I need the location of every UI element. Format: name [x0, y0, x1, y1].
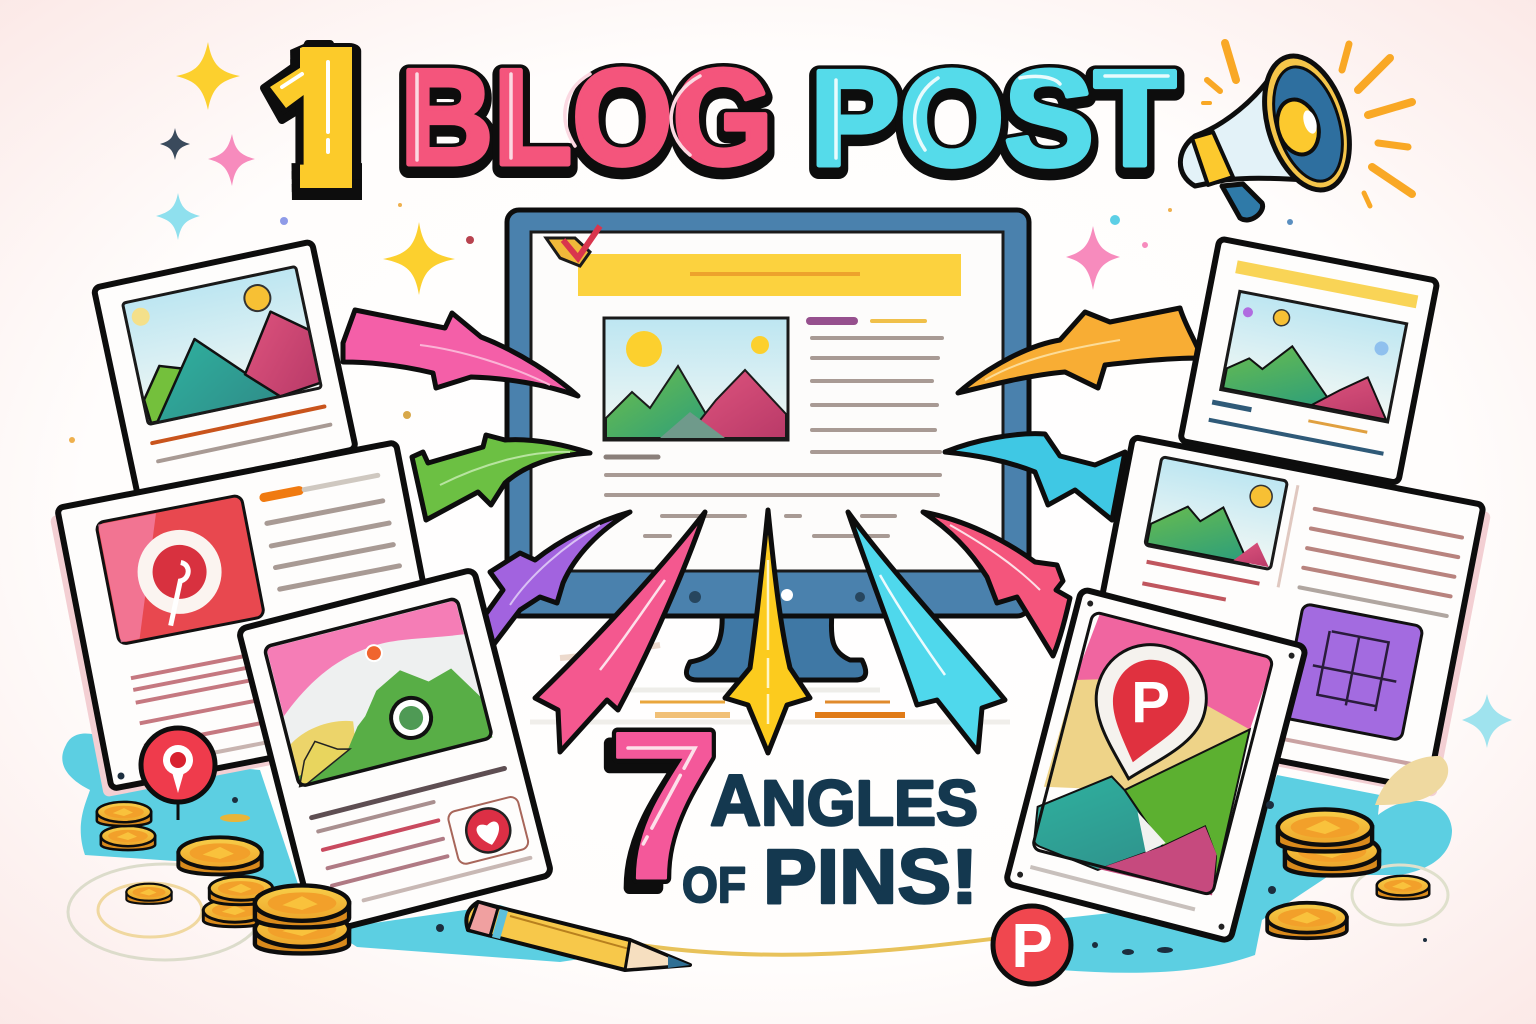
big pink 7: 7: [601, 698, 711, 933]
tan paint bubble: [1375, 756, 1448, 805]
title: blog: BLOG: [400, 45, 773, 197]
monitor: [507, 210, 1029, 680]
card: top left pin: [94, 242, 356, 495]
text: of: OF: [682, 857, 746, 913]
arrow: pink right lower: [923, 512, 1070, 656]
title: number 1: [260, 40, 362, 200]
megaphone cone: [1180, 72, 1320, 186]
arrow: pink upper left: [343, 310, 578, 396]
card: front right with pinterest pin: [1005, 589, 1306, 941]
arrow: yellow centre: [725, 510, 810, 753]
badge: pinterest bottom: P: [1011, 912, 1053, 981]
title: [260, 40, 1184, 200]
icon: pencil: [466, 902, 690, 970]
blog header bar: [578, 254, 961, 296]
arrow: orange upper right: [958, 308, 1202, 393]
icon: megaphone: [1180, 43, 1412, 220]
mountain image: [264, 598, 492, 787]
card: top right pin: [1180, 239, 1437, 483]
blog text lines: [606, 321, 942, 536]
checkmark badge: [546, 238, 590, 266]
paint specks: [118, 772, 1427, 955]
title: blog: BLOG: [400, 41, 773, 193]
arrow: pink lower: [535, 512, 705, 752]
title: post: POST: [810, 46, 1176, 198]
monitor stand: [686, 612, 866, 680]
pinterest pin marker: P: [1131, 670, 1170, 735]
pinterest tile: [96, 495, 265, 645]
monitor frame: [507, 210, 1029, 616]
arrow: cyan right: [945, 434, 1125, 520]
arrow: green left: [412, 435, 590, 520]
arrow: cyan lower right: [848, 512, 1005, 752]
coins left: [97, 802, 349, 953]
title: number 1: 1: [236, 3, 406, 232]
card: mid right with pin: [1077, 437, 1492, 797]
text: pins: PINS!: [763, 834, 978, 920]
cyan paint splash right: [1000, 775, 1452, 973]
coins right: [1267, 809, 1429, 938]
purple grid tile: [1281, 603, 1423, 741]
cyan paint splash left: [62, 733, 640, 962]
pin collage image: [1026, 610, 1273, 899]
blog image: [604, 318, 788, 440]
big pink 7: 7: [609, 688, 719, 923]
megaphone handle: [1222, 184, 1263, 220]
title: post: POST: [810, 42, 1176, 194]
card: mid left with pin: [48, 442, 452, 797]
text: angles: ANGLES: [710, 761, 978, 841]
arrow: purple lower left: [478, 512, 630, 652]
card: front left with mountain: [238, 569, 552, 935]
title: number 1: 1: [236, 7, 406, 236]
megaphone rays: [1203, 43, 1412, 206]
badge: pinterest bottom: [993, 906, 1071, 984]
badge: pinterest left: [141, 728, 215, 820]
monitor screen: [531, 232, 1003, 571]
arrows pointing to monitor: [343, 308, 1202, 753]
sparkles: [69, 42, 1512, 748]
seven angles heading: [601, 688, 978, 933]
big pink 7: 7: [609, 688, 719, 923]
pinterest pin marker: [1077, 633, 1218, 793]
swirl rings and floor streaks: [68, 645, 1448, 960]
bezel dots: [689, 589, 865, 603]
heart badge: [447, 795, 530, 865]
